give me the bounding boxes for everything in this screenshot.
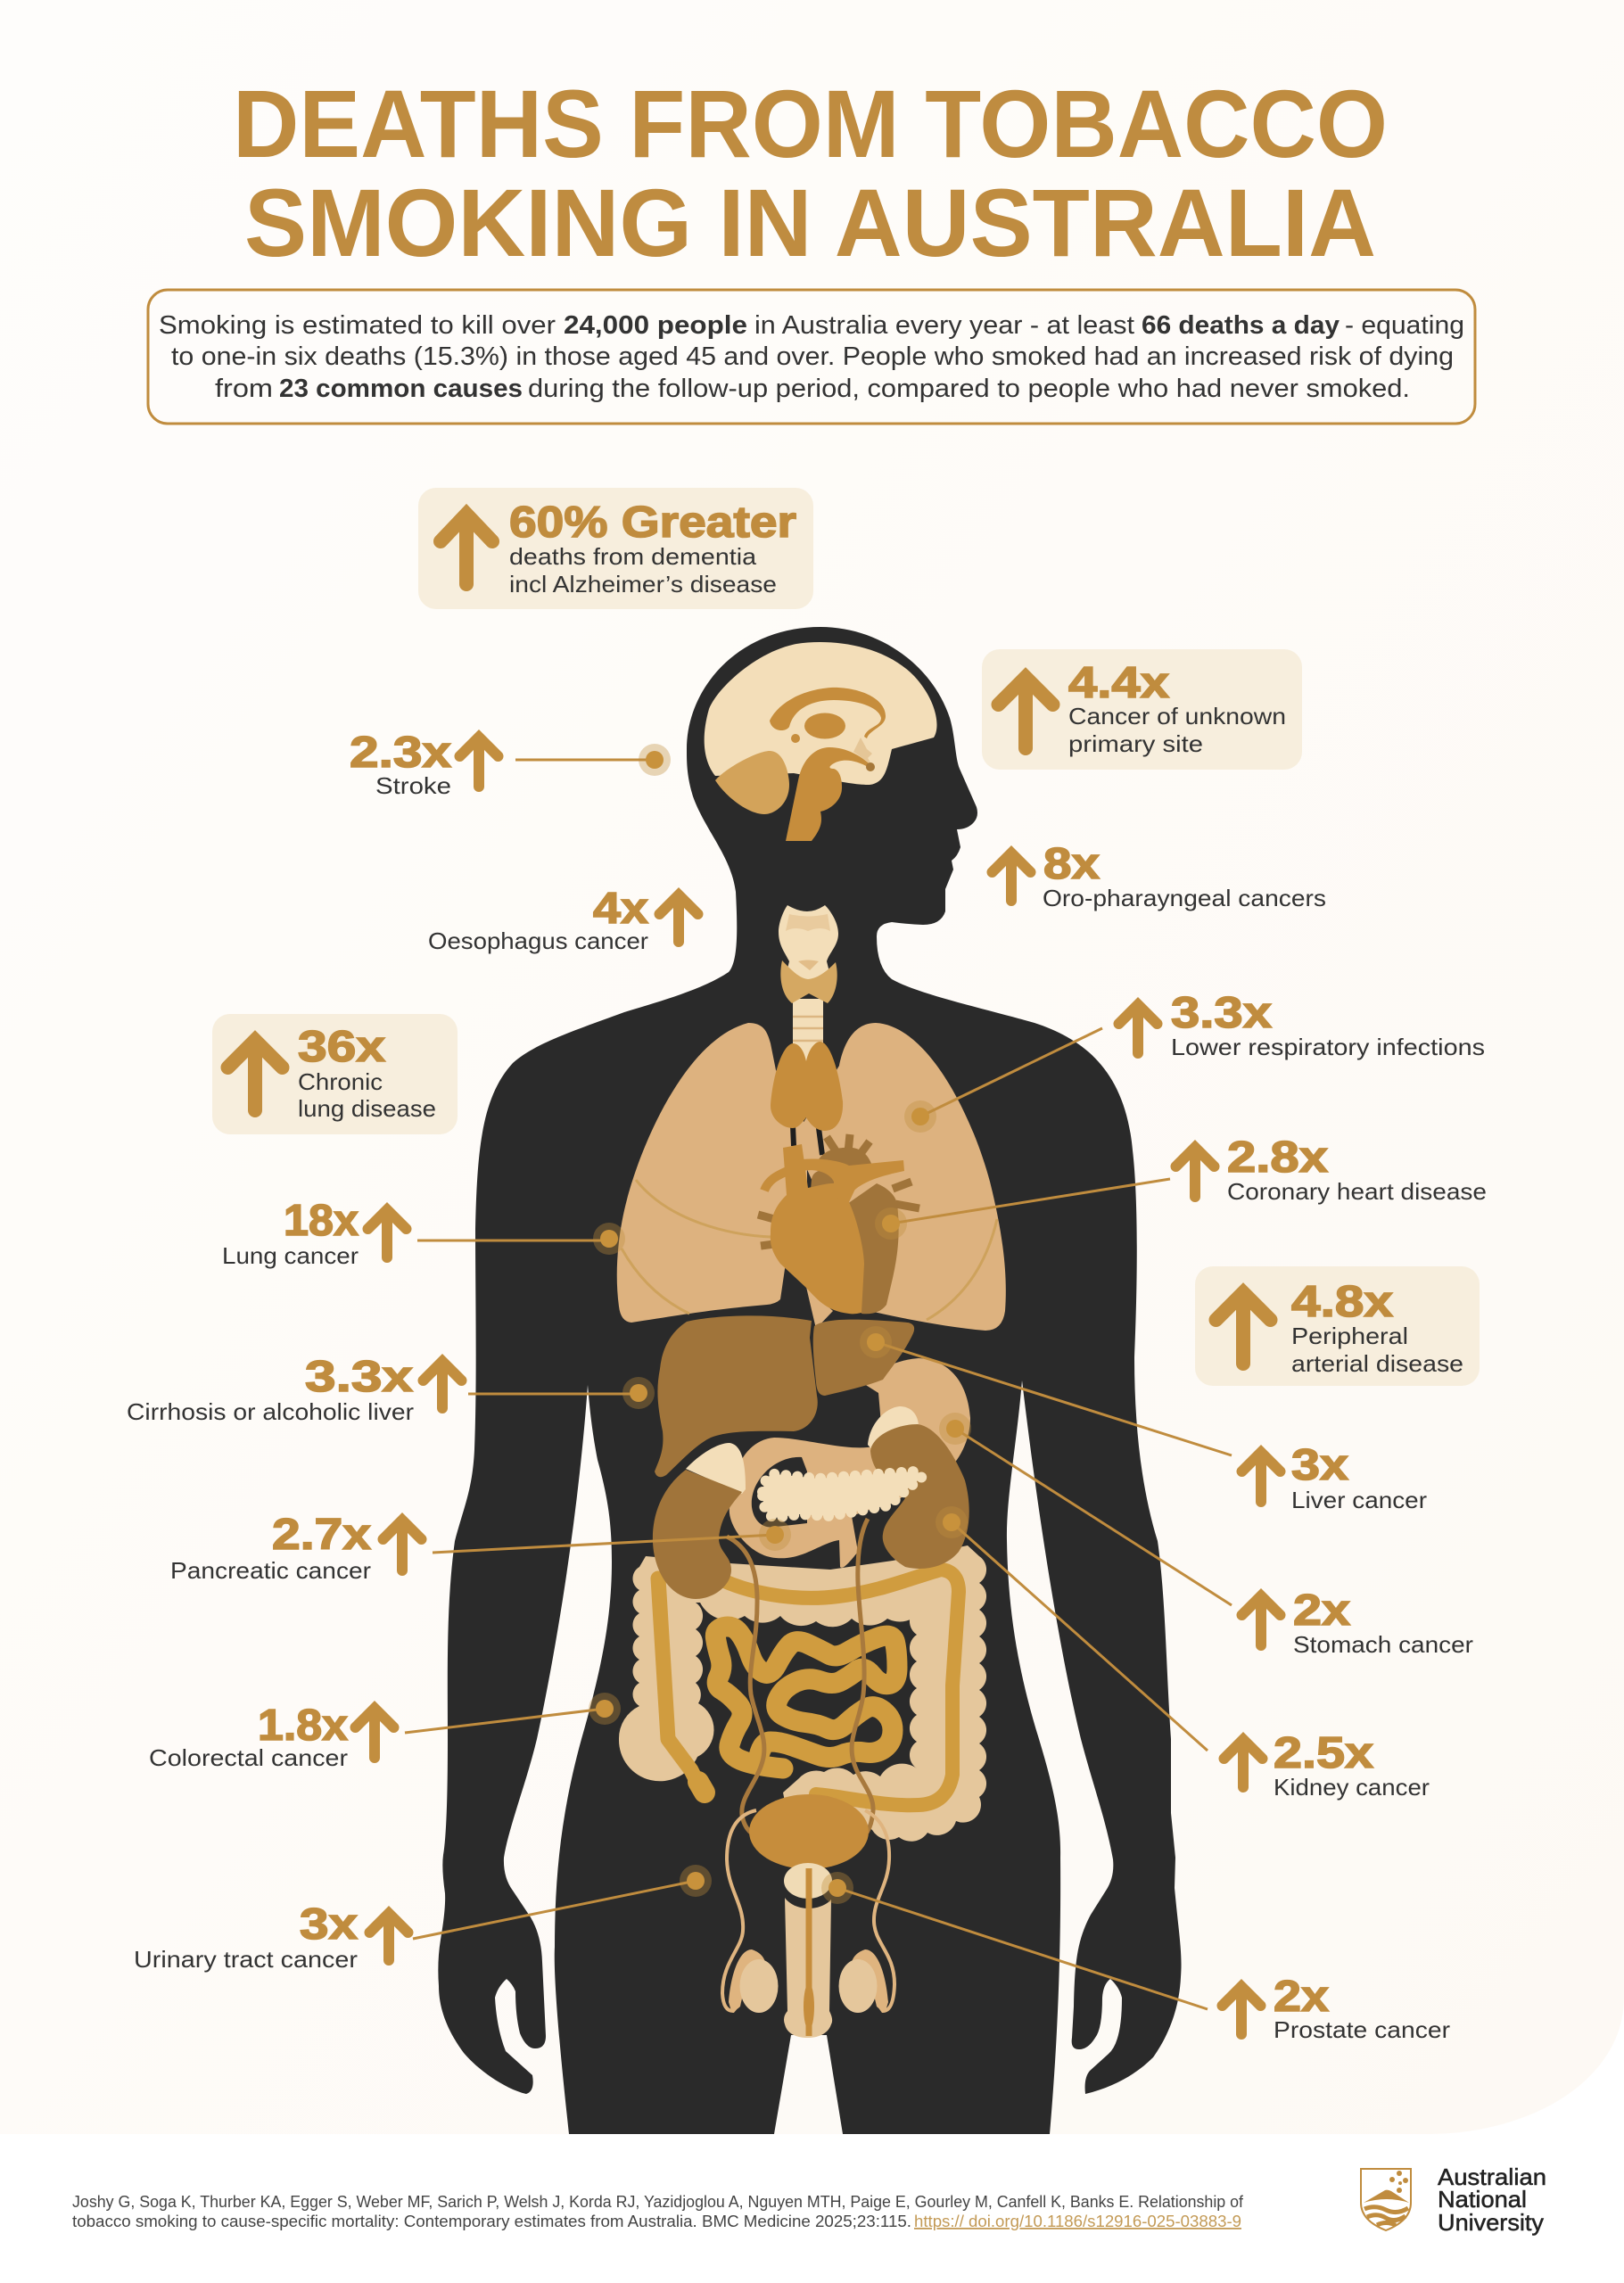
intro text panel: 66 deaths a day	[1142, 311, 1340, 340]
label: Urinary tract cancer	[134, 1946, 358, 1973]
citation text: https:// doi.org/10.1186/s12916-025-03883-9	[914, 2213, 1241, 2230]
label: Pancreatic cancer	[170, 1557, 371, 1584]
label line 2: arterial disease	[1291, 1350, 1463, 1377]
reproductive organs	[722, 1810, 894, 2038]
arrow icon	[367, 1209, 407, 1257]
bronchi	[771, 1042, 843, 1131]
heart	[758, 1134, 919, 1314]
label: Coronary heart disease	[1227, 1178, 1487, 1205]
callout: cancer of unknown primary site	[982, 649, 1302, 770]
ureters	[727, 1519, 873, 1833]
citation text: Joshy G, Soga K, Thurber KA, Egger S, Weber MF, Sarich P, Welsh J, Korda RJ, Yazidjoglou A, Nguyen MTH, Paige E, Gourley M, Canfell K, Banks E. Relationship of	[72, 2193, 1244, 2211]
arrow icon	[1241, 1452, 1281, 1502]
label: Stomach cancer	[1293, 1631, 1473, 1658]
stomach	[730, 1358, 970, 1568]
arrow icon	[1216, 1293, 1270, 1364]
value: 60% Greater: 60% Greater	[509, 499, 796, 547]
value: 4x: 4x	[593, 885, 648, 933]
value: 2x: 2x	[1293, 1587, 1350, 1635]
callout: chronic lung disease	[212, 1014, 458, 1134]
value: 2.8x: 2.8x	[1227, 1133, 1328, 1182]
callout: coronary heart disease	[1175, 1133, 1487, 1205]
logo: wordmark: National	[1438, 2186, 1527, 2213]
callout: prostate cancer	[1222, 1973, 1450, 2043]
connector: coronary heart disease	[875, 1179, 1170, 1240]
value: 3x: 3x	[1291, 1441, 1348, 1489]
callout: stomach cancer	[1241, 1587, 1473, 1658]
title	[233, 70, 1388, 276]
intro text panel: 24,000 people	[564, 311, 747, 340]
arrow icon	[1222, 1987, 1261, 2034]
value: 2.3x: 2.3x	[350, 729, 451, 777]
callout: dementia	[418, 488, 813, 609]
gallbladder	[686, 1443, 746, 1494]
label: Kidney cancer	[1274, 1774, 1430, 1801]
label: Prostate cancer	[1274, 2016, 1450, 2043]
label line 2: incl Alzheimer’s disease	[509, 571, 777, 598]
intro text panel: - equating	[1345, 311, 1464, 340]
intro text panel: Smoking is estimated to kill over	[159, 311, 556, 340]
connector: colorectal cancer	[405, 1693, 621, 1733]
arrow icon	[355, 1709, 394, 1758]
lungs	[617, 1023, 1006, 1331]
liver	[655, 1315, 914, 1477]
logo: wordmark: University	[1438, 2209, 1544, 2236]
arrow icon	[992, 853, 1031, 901]
callout: urinary tract cancer	[134, 1900, 408, 1973]
label line 1: Peripheral	[1291, 1323, 1408, 1349]
label: Lower respiratory infections	[1171, 1034, 1485, 1060]
intro text panel: to one-in six deaths (15.3%) in those aged 45 and over. People who smoked had an increased risk of dying	[171, 342, 1454, 371]
callout: kidney cancer	[1224, 1729, 1430, 1801]
label: Oro-pharayngeal cancers	[1043, 885, 1326, 911]
arrow icon	[999, 678, 1052, 748]
arrow icon	[228, 1040, 282, 1110]
large intestine	[619, 1545, 986, 1842]
spleen	[868, 1406, 919, 1463]
connector: cirrhosis	[468, 1377, 655, 1409]
kidneys	[653, 1424, 969, 1599]
brain	[705, 642, 937, 841]
value: 2x: 2x	[1274, 1973, 1329, 2021]
value: 3x: 3x	[300, 1900, 358, 1949]
title: DEATHS FROM TOBACCO	[233, 70, 1388, 177]
label: Cirrhosis or alcoholic liver	[127, 1398, 414, 1425]
arrow icon	[660, 895, 697, 942]
value: 1.8x: 1.8x	[258, 1702, 348, 1750]
value: 3.3x: 3.3x	[305, 1353, 413, 1401]
label: Colorectal cancer	[149, 1744, 348, 1771]
arrow icon	[1241, 1596, 1281, 1645]
callout: lower respiratory infections	[1118, 989, 1485, 1060]
connector: lower respiratory infections	[904, 1028, 1102, 1133]
connector: prostate cancer	[821, 1872, 1208, 2009]
arrow icon	[441, 514, 492, 584]
small intestine	[715, 1627, 897, 1768]
callout: lung cancer	[222, 1197, 407, 1269]
trachea	[793, 999, 823, 1061]
callout: peripheral arterial disease	[1195, 1266, 1480, 1386]
label line 1: deaths from dementia	[509, 543, 757, 570]
label line 2: lung disease	[298, 1095, 436, 1122]
connector: urinary tract cancer	[413, 1865, 712, 1939]
connector: liver cancer	[860, 1326, 1232, 1455]
title: SMOKING IN AUSTRALIA	[244, 169, 1376, 276]
label: Lung cancer	[222, 1242, 359, 1269]
callout: cirrhosis or alcoholic liver	[127, 1353, 462, 1425]
value: 3.3x: 3.3x	[1171, 989, 1272, 1037]
arrow icon	[460, 737, 498, 787]
value: 8x: 8x	[1043, 840, 1100, 888]
citation text: tobacco smoking to cause-specific mortality: Contemporary estimates from Australia. BMC Medicine 2025;23:115.	[72, 2213, 911, 2230]
value: 2.7x: 2.7x	[272, 1511, 371, 1559]
label: Stroke	[375, 772, 451, 799]
pancreas	[763, 1471, 921, 1518]
arrow icon	[423, 1361, 462, 1408]
human body silhouette	[438, 627, 1182, 2134]
intro text panel: in Australia every year - at least	[754, 311, 1134, 340]
label line 1: Cancer of unknown	[1068, 703, 1286, 729]
connector: pancreatic cancer	[433, 1519, 791, 1553]
arrow icon	[383, 1520, 421, 1570]
thyroid	[780, 960, 837, 1003]
callout: liver cancer	[1241, 1441, 1427, 1513]
value: 36x: 36x	[298, 1023, 385, 1071]
callout: pancreatic cancer	[170, 1511, 421, 1584]
arrow icon	[1224, 1739, 1263, 1787]
bladder	[749, 1794, 869, 1869]
value: 4.4x: 4.4x	[1068, 659, 1169, 707]
connector: stomach cancer	[939, 1413, 1232, 1605]
value: 2.5x: 2.5x	[1274, 1729, 1373, 1777]
value: 4.8x: 4.8x	[1291, 1278, 1393, 1326]
arrow icon	[369, 1914, 408, 1960]
label line 1: Chronic	[298, 1068, 383, 1095]
callout: colorectal cancer	[149, 1702, 394, 1771]
arrow icon	[1175, 1147, 1215, 1197]
citation text	[72, 2193, 1244, 2230]
intro text panel: 23 common causes	[279, 375, 523, 403]
intro text panel: during the follow-up period, compared to people who had never smoked.	[528, 375, 1410, 403]
logo: wordmark	[1438, 2163, 1546, 2236]
logo: ANU shield	[1361, 2169, 1411, 2230]
label: Oesophagus cancer	[428, 927, 648, 954]
label: Liver cancer	[1291, 1487, 1427, 1513]
callout: oesophagus cancer	[428, 885, 697, 954]
arrow icon	[1118, 1004, 1158, 1053]
label line 2: primary site	[1068, 730, 1203, 757]
intro text panel: from	[215, 375, 273, 403]
connector: lung cancer	[417, 1223, 625, 1255]
intro text panel	[148, 290, 1475, 424]
connector: stroke	[515, 744, 671, 776]
value: 18x: 18x	[284, 1197, 359, 1245]
larynx	[779, 905, 838, 981]
callout: stroke	[350, 729, 498, 799]
logo: wordmark: Australian	[1438, 2163, 1546, 2190]
connector: kidney cancer	[936, 1506, 1208, 1751]
callout: oro-pharyngeal cancers	[992, 840, 1326, 911]
